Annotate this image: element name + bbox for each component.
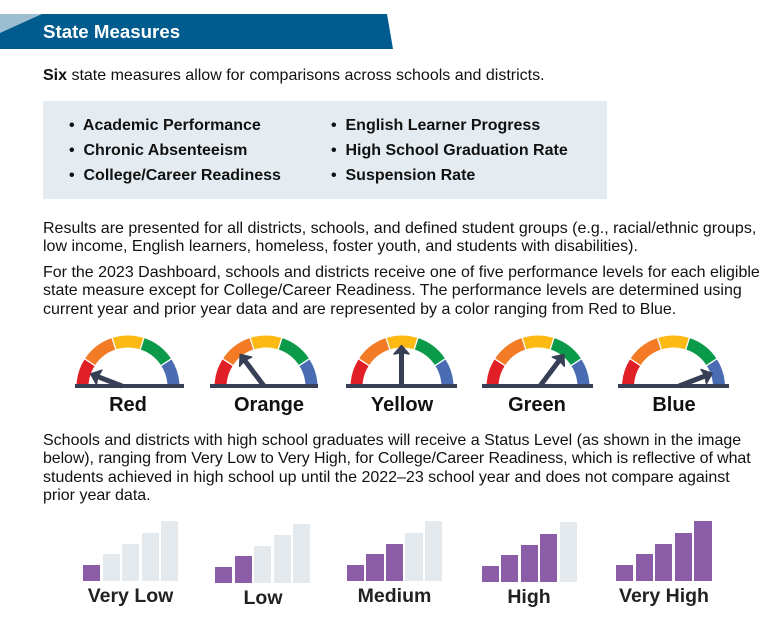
status: Low: Low (244, 587, 283, 609)
status: Medium (347, 521, 442, 607)
header banner (0, 14, 393, 49)
label: Blue: Blue (652, 394, 696, 416)
measure: Academic Performance: • Academic Performance (69, 117, 261, 134)
label: Yellow: Yellow (371, 394, 434, 416)
status: High (482, 522, 577, 608)
gauge: Green (482, 337, 593, 391)
text block: performance levels: state measure except for College/Career Readiness. The performance levels are determined using (43, 282, 742, 299)
measure: English Learner Progress: • English Learner Progress (331, 117, 540, 134)
gauge: Red (75, 337, 184, 393)
measure: High School Graduation Rate: • High School Graduation Rate (331, 142, 568, 159)
text block: results presented: Results are presented for all districts, schools, and defined student groups (e.g., racial/ethnic groups, (43, 220, 756, 237)
text block: status level: prior year data. (43, 487, 151, 504)
label: Orange: Orange (234, 394, 304, 416)
panel: six measures list (43, 101, 607, 199)
label: Green: Green (508, 394, 566, 416)
measure: Suspension Rate: • Suspension Rate (331, 167, 475, 184)
intro sentence: Six state measures allow for comparisons across schools and districts. (43, 67, 545, 84)
status: Low (215, 524, 310, 609)
text block: performance levels: current year and prior year data and are represented by a color ranging from Red to Blue. (43, 301, 676, 318)
text block: status level: students achieved in high school up until the 2022–23 school year and does not compare against (43, 469, 730, 486)
status: Medium: Medium (358, 585, 431, 607)
gauge: Yellow (346, 337, 457, 388)
text block: results presented: low income, English learners, homeless, foster youth, and students with disabilities). (43, 238, 638, 255)
status: Very Low (83, 521, 178, 607)
measure: Chronic Absenteeism: • Chronic Absenteeism (69, 142, 247, 159)
text block: performance levels (43, 264, 760, 318)
status: High: High (507, 586, 551, 608)
label: Red: Red (109, 394, 147, 416)
text block: status level (43, 432, 751, 504)
measure: College/Career Readiness: • College/Career Readiness (69, 167, 281, 184)
text block: status level: below), ranging from Very Low to Very High, for College/Career Readiness, which is reflective of what (43, 450, 751, 467)
text block: performance levels: For the 2023 Dashboard, schools and districts receive one of five performance levels for each eligible (43, 264, 760, 281)
gauge: Orange (210, 337, 318, 391)
gauge: Blue (618, 337, 729, 393)
text block: status level: Schools and districts with high school graduates will receive a Status Level (as shown in the image (43, 432, 741, 449)
status: Very Low: Very Low (88, 585, 174, 607)
text block: results presented (43, 220, 756, 255)
status: Very High: Very High (619, 585, 709, 607)
status: Very High (616, 521, 712, 607)
heading: State Measures (43, 21, 180, 42)
